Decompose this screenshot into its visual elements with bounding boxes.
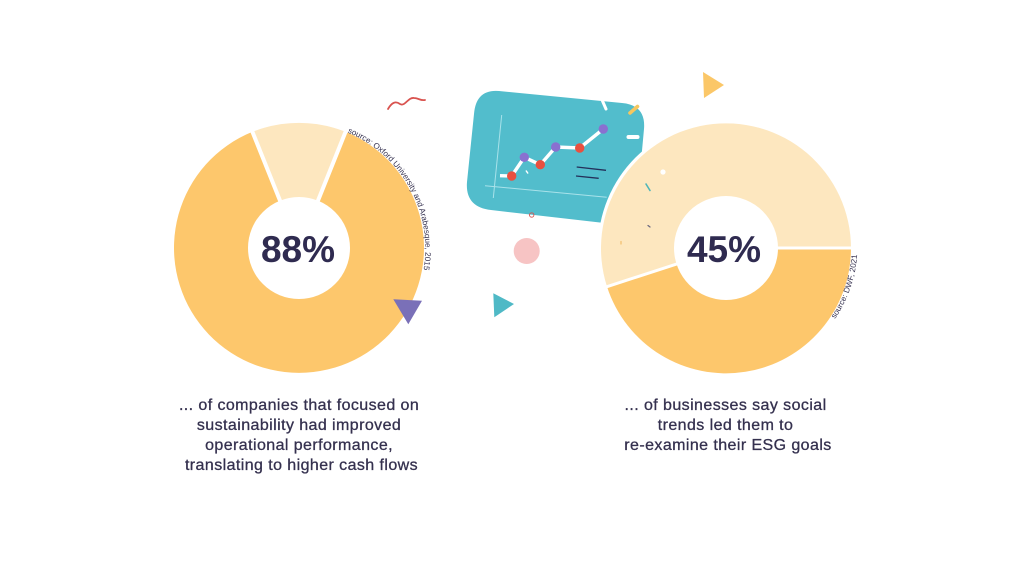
caption: 88%: ... of companies that focused on xyxy=(179,397,419,414)
decor: pink circle xyxy=(514,238,540,264)
caption: 45%: re-examine their ESG goals xyxy=(624,437,832,454)
segment separators xyxy=(605,248,853,287)
donut chart: 88% xyxy=(174,123,424,373)
donut confetti xyxy=(621,169,666,244)
decor: yellow triangle xyxy=(703,72,724,98)
icon: chart card xyxy=(467,91,644,224)
decor: purple triangle xyxy=(393,299,422,324)
decor: red squiggle xyxy=(388,98,425,109)
donut chart: 45% xyxy=(598,120,854,376)
chart axes xyxy=(485,115,607,198)
decor: teal triangle xyxy=(493,293,514,317)
decor: red ring xyxy=(530,213,534,217)
caption: 88%: translating to higher cash flows xyxy=(185,457,418,474)
segment: 45% xyxy=(607,248,851,373)
line series xyxy=(500,129,603,176)
caption: 88%: sustainability had improved xyxy=(197,417,401,434)
card background xyxy=(467,91,644,224)
segment separators xyxy=(252,130,346,248)
caption: 45%: trends led them to xyxy=(658,417,793,434)
caption: 88%: operational performance, xyxy=(205,437,393,454)
value: 88% xyxy=(261,229,335,270)
segment: 55% xyxy=(601,123,851,287)
donut hole xyxy=(674,196,778,300)
data points xyxy=(507,124,608,181)
source note: DWF: source: DWF, 2021 xyxy=(832,255,858,318)
donut hole xyxy=(248,197,350,299)
value: 45% xyxy=(687,229,761,270)
caption: 45%: ... of businesses say social xyxy=(625,397,827,414)
card confetti xyxy=(526,101,638,173)
source note: Oxford: source: Oxford University and Arabesque, 2015 xyxy=(348,129,431,270)
segment: 88% xyxy=(174,132,424,373)
legend lines xyxy=(576,167,606,178)
segment: 12% xyxy=(252,123,346,248)
white ring xyxy=(598,120,854,376)
